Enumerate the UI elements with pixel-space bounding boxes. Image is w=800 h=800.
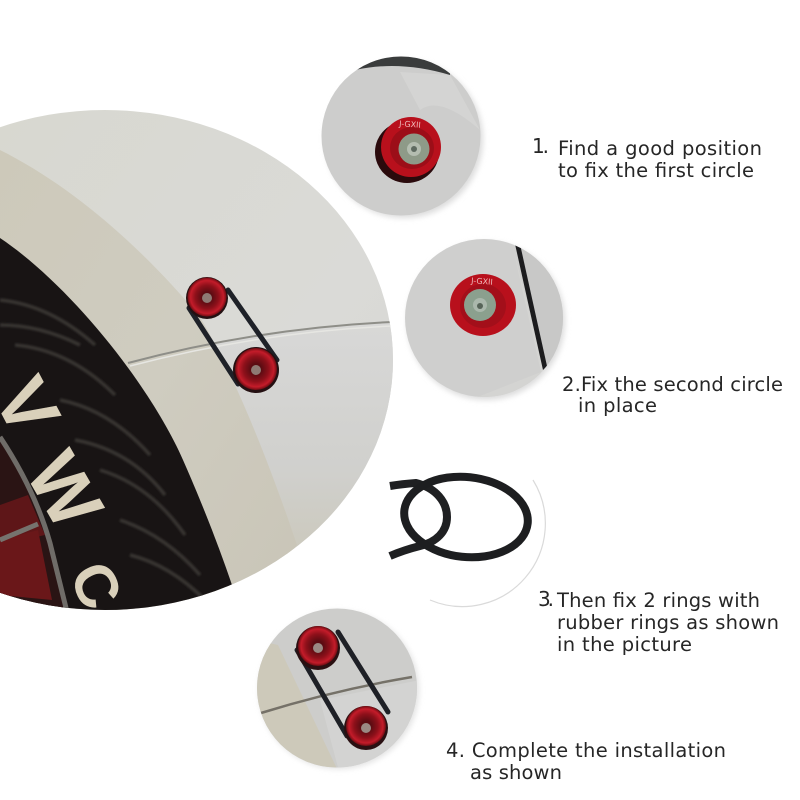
- lower fender panel: [194, 328, 393, 598]
- car edge strip: [356, 56, 450, 75]
- wheel rim edge: [0, 437, 67, 612]
- step 3 text: Then fix 2 rings with: [556, 589, 760, 612]
- tyre tread: [0, 300, 205, 600]
- step 4 text: 4. Complete the installation: [446, 739, 726, 762]
- lower panel: [320, 680, 420, 775]
- bolts: [296, 626, 340, 670]
- panel seam: [128, 322, 392, 363]
- tyre lettering: [1, 372, 118, 608]
- step 1 text: [532, 134, 762, 182]
- tyre lettering: C: [56, 551, 136, 620]
- circle 1: first bolt close-up: [320, 50, 485, 220]
- circle 3: rubber rings: [390, 471, 545, 607]
- circle 2: second bolt close-up: [400, 235, 570, 405]
- step 1 text: to fix the first circle: [558, 159, 754, 182]
- step 3 text: [538, 587, 779, 656]
- rubber ring: [189, 290, 277, 384]
- step 3 text: 3.: [538, 587, 554, 611]
- panel gap: [515, 244, 547, 370]
- bolt marking: J-GXII: [398, 119, 421, 130]
- step 1 text: Find a good position: [558, 137, 762, 160]
- step 4 text: [446, 739, 726, 784]
- tyre lettering: W: [9, 438, 119, 543]
- bolt marking: J-GXII: [470, 276, 493, 287]
- step 2 text: in place: [578, 394, 657, 417]
- tyre: [0, 238, 232, 620]
- step 3 text: rubber rings as shown: [557, 611, 779, 634]
- step 3 text: in the picture: [557, 633, 692, 656]
- small ring behind: [390, 483, 447, 556]
- bolt A: [186, 277, 228, 319]
- step 2 text: [562, 373, 783, 417]
- beige wheel arch band: [0, 150, 297, 620]
- photo: car wheel arch with installed rings: [0, 100, 400, 620]
- step 2 text: 2.Fix the second circle: [562, 373, 783, 396]
- step 4 text: as shown: [470, 761, 562, 784]
- panel fold: [521, 248, 563, 364]
- large ring: [400, 471, 532, 563]
- seam: [261, 677, 412, 713]
- bolt B: [233, 347, 279, 393]
- red bolt: [450, 274, 516, 336]
- step 1 text: 1.: [532, 134, 549, 158]
- circle 4: completed installation: [255, 605, 420, 775]
- rubber ring: [297, 632, 388, 736]
- red bolt: [375, 121, 439, 183]
- wheel rim interior: [0, 442, 64, 608]
- beige wing section: [257, 644, 336, 768]
